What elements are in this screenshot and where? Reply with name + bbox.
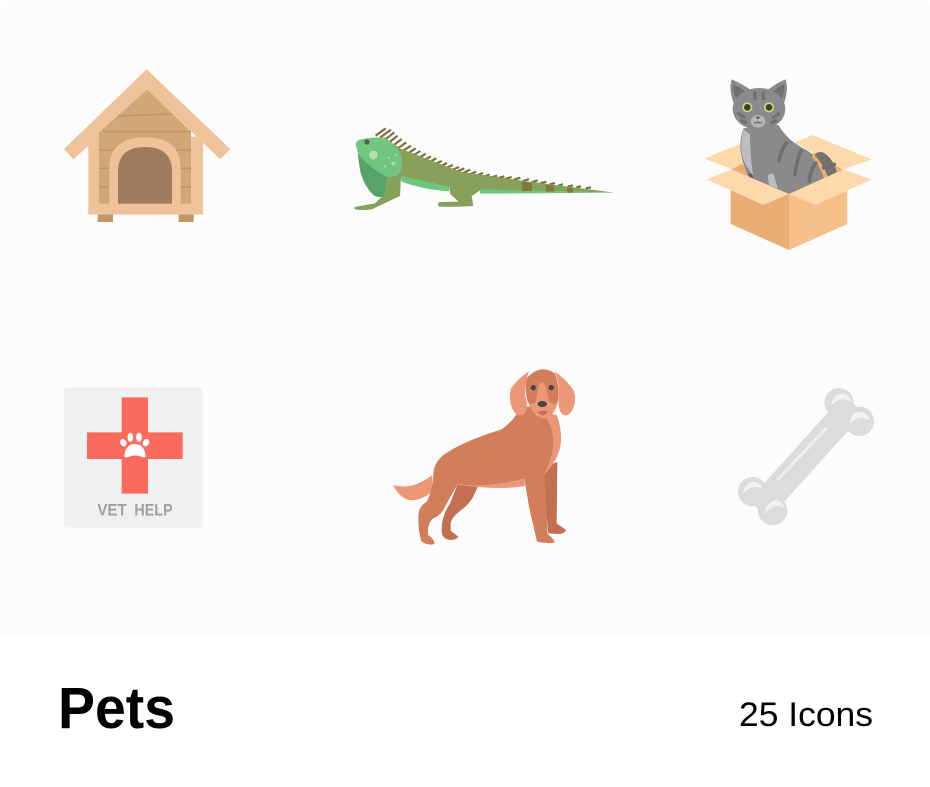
icon: dog <box>393 369 575 545</box>
icon: cat in a cardboard box <box>704 79 872 250</box>
icon: vet help sign <box>64 387 203 528</box>
text: vet help: HELP <box>134 501 173 520</box>
icon: bone <box>738 388 874 525</box>
icon: dog house <box>64 69 230 222</box>
text: vet help: VET <box>97 501 127 520</box>
icon count: 25 icons: 25 Icons <box>739 696 873 734</box>
title: pets: Pets <box>58 676 175 741</box>
icon: iguana <box>354 128 614 210</box>
